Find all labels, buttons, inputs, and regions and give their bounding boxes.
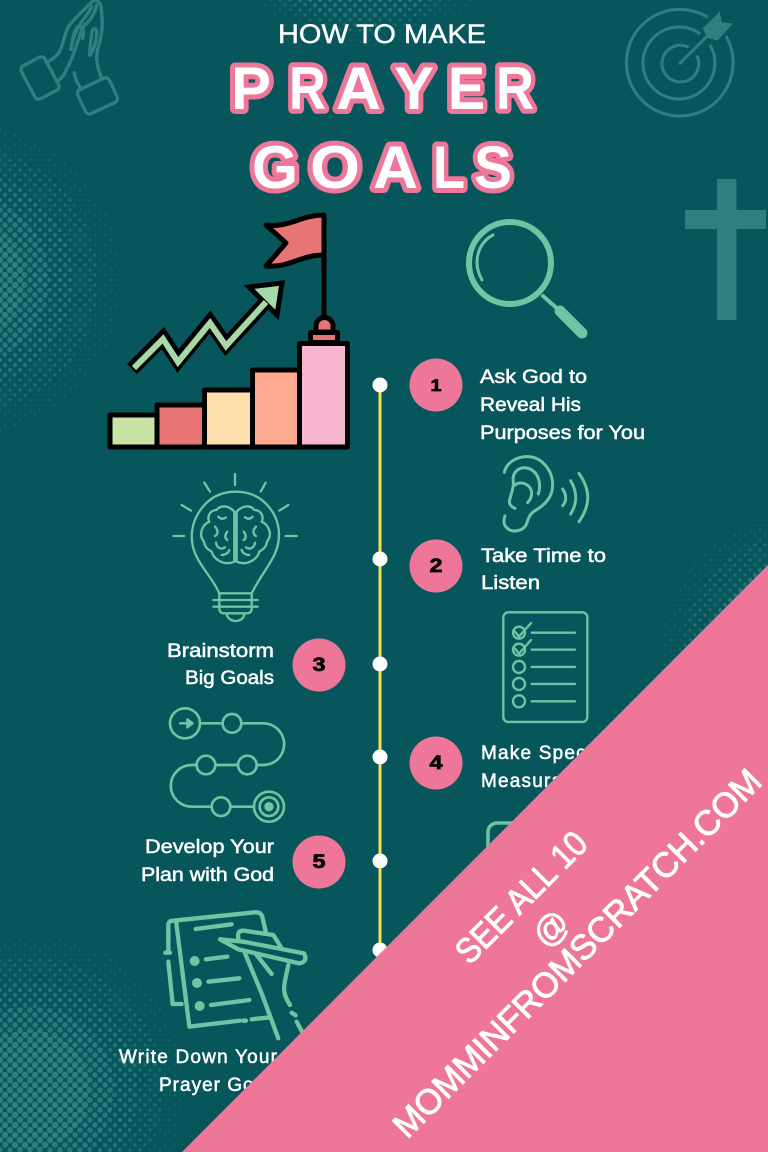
title: goals: L [433, 134, 465, 201]
step 6 label: Prayer Goals [159, 1075, 282, 1096]
step 1: Ask God to [480, 367, 587, 388]
step 3: Brainstorm [167, 641, 274, 662]
timeline line [378, 385, 382, 975]
pink banner [182, 565, 768, 1152]
icon: bar chart with flag [110, 215, 348, 447]
title: prayer: E [448, 55, 485, 122]
title: goals [252, 134, 512, 201]
title: prayer: A [336, 55, 381, 122]
growth arrow [132, 283, 282, 369]
icon: praying hands [19, 0, 119, 115]
step 5: Plan with God [141, 865, 274, 886]
icon: magnifying glass [469, 222, 582, 333]
icon: lightbulb with brain [173, 474, 297, 621]
halftone: right [660, 510, 768, 810]
step 1: 1 [430, 376, 442, 395]
title: prayer: Y [394, 55, 434, 122]
title: prayer: R [496, 55, 534, 122]
title: goals: G [252, 134, 298, 201]
halftone: bottom left [0, 935, 185, 1152]
title: prayer: R [289, 55, 326, 122]
timeline dots [372, 378, 388, 958]
title: how to make: HOW TO MAKE [278, 19, 486, 49]
step 6 label [119, 1047, 282, 1096]
icon: checklist [503, 612, 587, 722]
step 1 [410, 358, 645, 444]
icon: ear [504, 457, 588, 531]
icon: target with arrow [626, 9, 733, 116]
title: goals: O [310, 134, 360, 201]
icon: writing hand and list [165, 912, 305, 1038]
step 3 [167, 638, 346, 692]
title: prayer: P [231, 55, 271, 122]
step 1: Reveal His [480, 395, 581, 416]
step 4: Make Specific, [481, 743, 621, 764]
title: prayer [231, 55, 534, 122]
step 5 [141, 836, 346, 888]
step 6 label: Write Down Your [119, 1047, 278, 1068]
icon: partly hidden clipboard [488, 823, 588, 933]
step 2: Take Time to [481, 546, 606, 567]
halftone: top [214, 0, 510, 48]
step 3: 3 [312, 655, 326, 676]
title: goals: A [373, 134, 418, 201]
halftone: left [0, 125, 120, 435]
icon: cross [685, 179, 766, 320]
step 5: 5 [312, 852, 326, 873]
step 2: 2 [430, 556, 442, 577]
flag [266, 215, 338, 342]
icon: winding route [170, 708, 284, 822]
step 1: Purposes for You [480, 423, 645, 444]
step 4: Measurable Goals [481, 771, 654, 792]
banner text: SEE ALL 10 [448, 824, 595, 972]
step 2: Listen [481, 573, 540, 594]
step 4: 4 [430, 753, 443, 774]
step 3: Big Goals [185, 668, 274, 689]
title: goals: S [474, 134, 512, 201]
step 4 [410, 736, 654, 792]
banner text: MOMMINFROMSCRATCH.COM [385, 762, 768, 1146]
banner text: @ [525, 902, 578, 955]
step 5: Develop Your [145, 837, 275, 858]
bars [110, 344, 348, 447]
step 2 [410, 540, 606, 594]
